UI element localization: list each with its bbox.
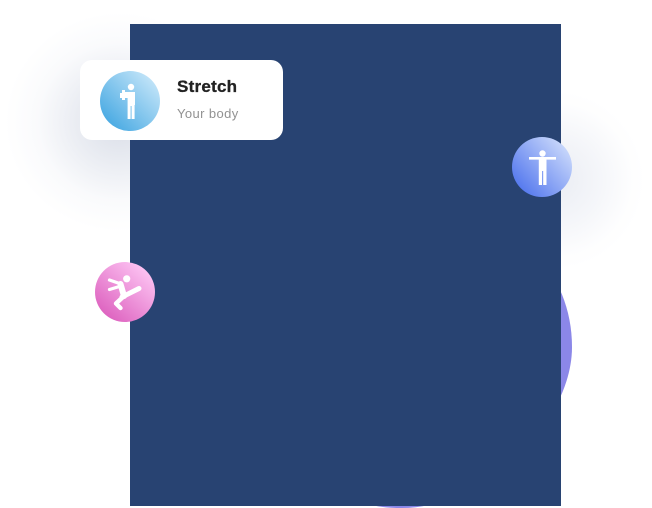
card: stretch (80, 60, 283, 140)
heading: Stretch: Stretch (177, 77, 237, 96)
icon: standing person badge (512, 137, 572, 197)
icon: stretching person (100, 71, 160, 131)
soft shadow behind card (5, 12, 235, 232)
soft shadow behind blue badge (465, 90, 645, 270)
icon: kicking person badge (95, 262, 155, 322)
navy image panel (130, 24, 561, 506)
subtitle: Your body: Your body (177, 106, 239, 121)
